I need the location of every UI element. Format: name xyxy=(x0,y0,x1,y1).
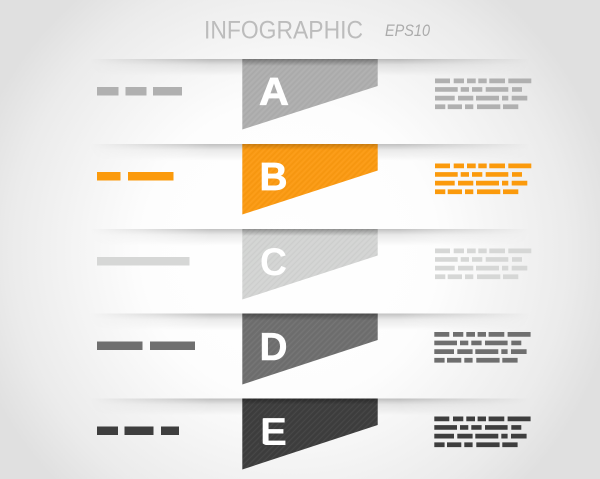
row E xyxy=(97,398,531,470)
left label bars E xyxy=(97,426,179,435)
ribbon B xyxy=(242,144,378,214)
left label bar C xyxy=(97,257,190,266)
right text bars D xyxy=(434,332,531,363)
subtitle: EPS10: EPS10 xyxy=(385,21,430,40)
left label bars D xyxy=(97,342,195,350)
ribbon D: D xyxy=(260,326,288,369)
row B xyxy=(97,144,531,214)
right text bars A xyxy=(435,78,531,109)
ribbon B: B xyxy=(260,156,288,199)
ribbon A xyxy=(242,59,378,130)
right text bars C xyxy=(435,248,531,279)
right text bars E xyxy=(434,416,531,447)
ribbon C: C xyxy=(260,241,287,284)
right text bars B xyxy=(435,164,531,194)
left label bars B xyxy=(97,172,174,180)
row A xyxy=(97,59,531,130)
ribbon D xyxy=(242,314,378,384)
ribbon E: E xyxy=(260,411,287,454)
panel shadows xyxy=(107,59,512,411)
ribbon A: A xyxy=(259,71,289,114)
row D xyxy=(97,314,531,384)
ribbon E xyxy=(242,398,378,470)
row C xyxy=(97,229,531,300)
ribbon C xyxy=(242,229,378,300)
title: INFOGRAPHIC xyxy=(204,16,363,44)
left label bars A xyxy=(97,87,182,96)
